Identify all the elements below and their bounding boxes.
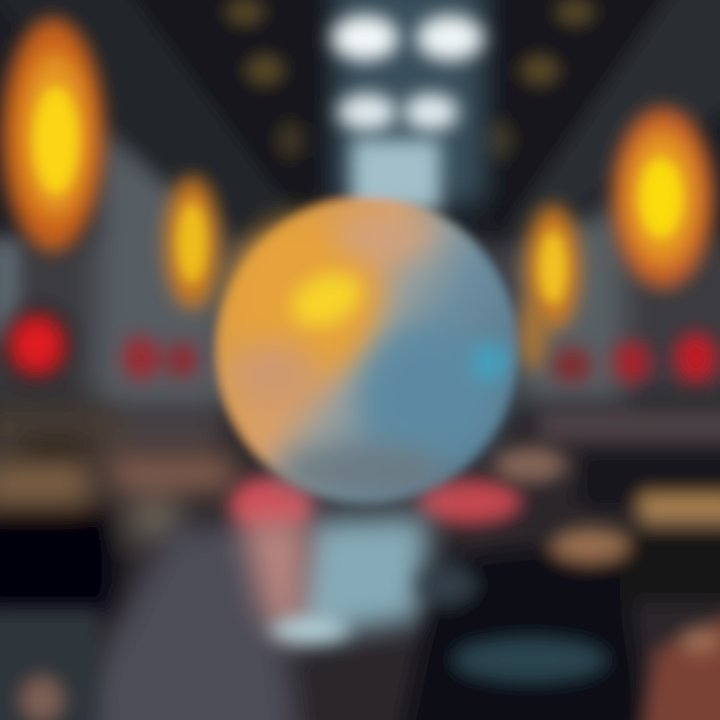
tables: left row	[0, 405, 235, 615]
globe: lower shade	[275, 446, 445, 494]
globe: yellow highlight	[283, 263, 369, 337]
red lights: row left	[1, 307, 198, 383]
globe: lower left peach	[230, 341, 320, 409]
globe: cyan highlight	[472, 342, 508, 382]
lantern: far right	[613, 108, 713, 288]
floor: red reflection right	[418, 480, 522, 524]
skylight: white panels and pale column	[332, 0, 485, 210]
floor: grey aisle	[50, 520, 300, 720]
lantern: inner left	[165, 177, 219, 309]
floor: lower right warm corner	[640, 610, 720, 720]
floor: pale blue reflection	[240, 515, 430, 642]
globe: upper peach rim	[335, 218, 435, 258]
ceiling: dark perspective beams	[0, 0, 720, 240]
lantern: inner right	[519, 206, 580, 371]
ceiling lamps: dim amber	[225, 0, 595, 160]
lantern: far left orange and yellow	[3, 19, 103, 251]
tables: right foreground dark	[400, 410, 720, 720]
red lights: row right	[552, 333, 718, 383]
floor: red reflection left	[230, 477, 314, 533]
globe: orange land band	[230, 220, 380, 380]
globe	[217, 198, 517, 502]
floor: lower left corner	[0, 610, 100, 720]
globe: blue ocean	[360, 325, 500, 465]
